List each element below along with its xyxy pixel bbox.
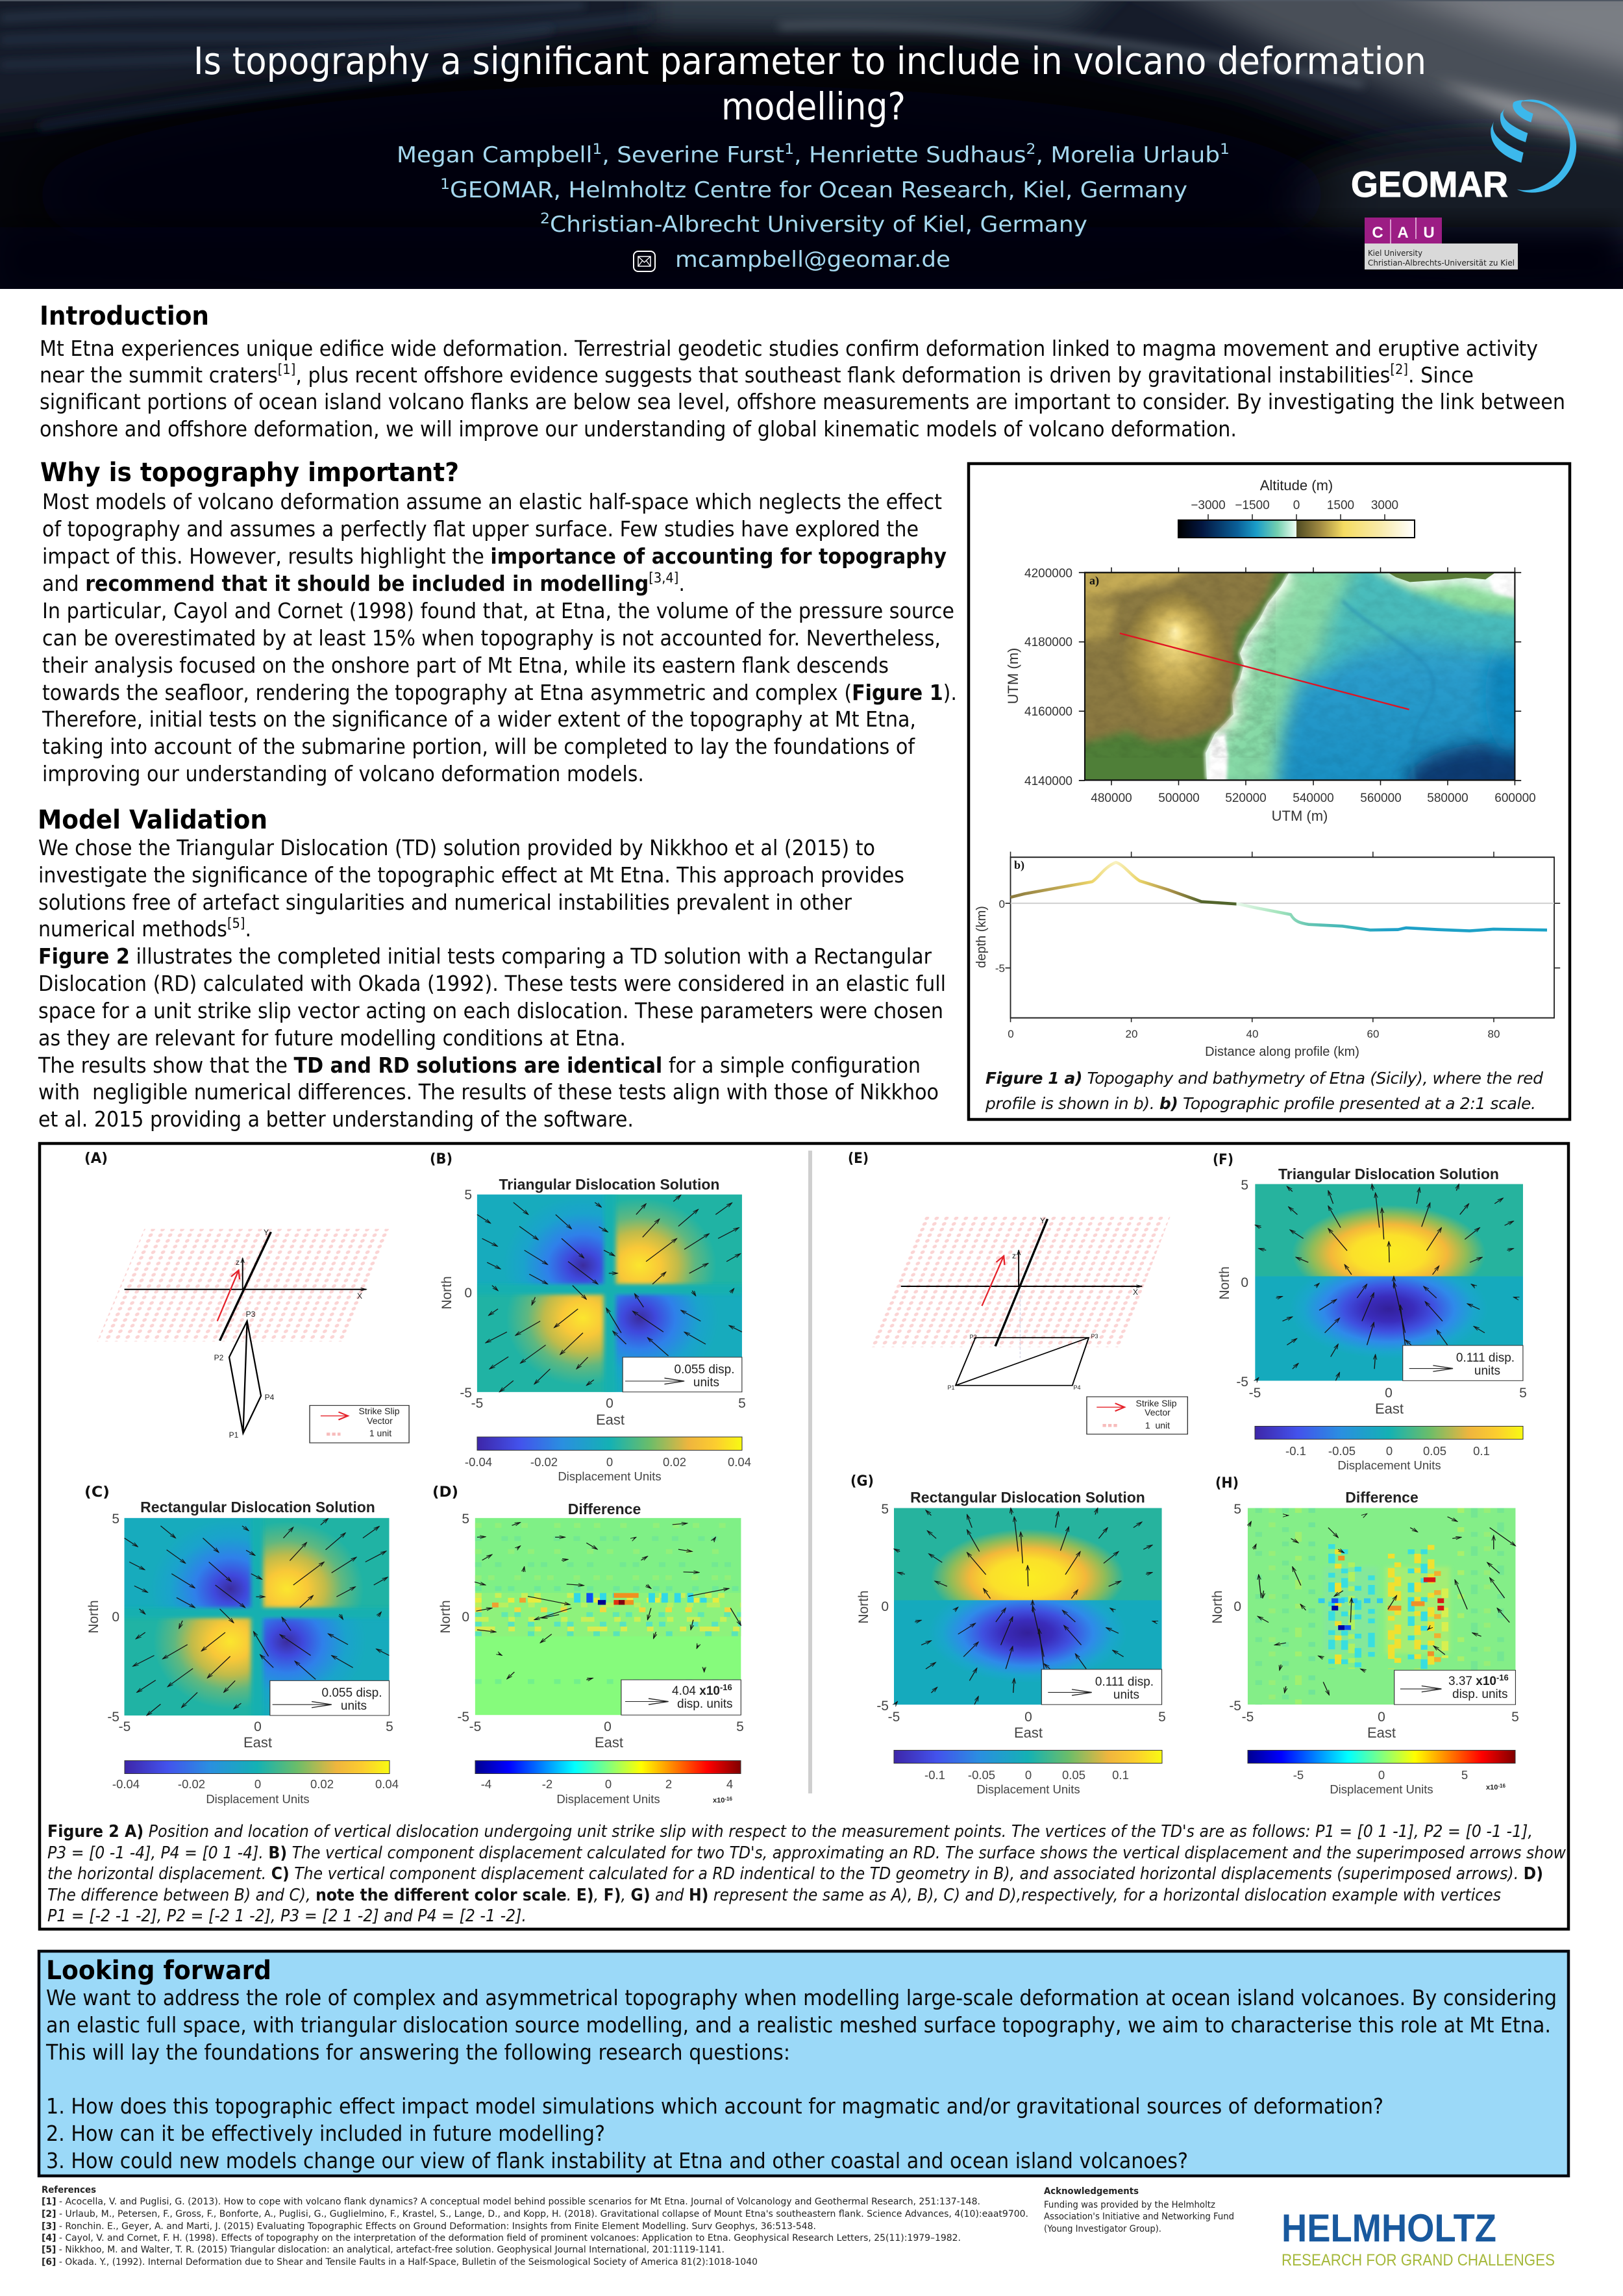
chart D: difference: 0 [462, 1610, 469, 1625]
heading: why is topography important: Why is topography important? [40, 458, 459, 488]
chart B: triangular dislocation solution: 0 [464, 1286, 472, 1301]
chart C: rectangular dislocation solution: 0.055 disp. [322, 1686, 382, 1700]
authors and affiliations: , Henriette Sudhaus [794, 142, 1026, 168]
chart: topographic profile: depth (km) [974, 906, 989, 968]
chart: topographic profile: Distance along profile (km) [1205, 1045, 1359, 1059]
text block: looking forward body: an elastic full space, with triangular dislocation source modelling, and a realistic meshed surface topography, we aim to characterise this role at Mt Etna. [46, 2013, 1551, 2038]
chart D: difference: 5 [736, 1719, 744, 1734]
chart: topography map: UTM (m) [1272, 808, 1328, 824]
chart G: rectangular dislocation solution: 5 [1158, 1710, 1166, 1725]
text block: topography body: their analysis focused on the onshore part of Mt Etna, while its eastern flank descends [42, 653, 889, 678]
chart D: difference: -5 [469, 1719, 481, 1734]
chart C: rectangular dislocation solution: 5 [112, 1512, 119, 1527]
chart G: rectangular dislocation solution: East [1014, 1725, 1043, 1741]
colour scale: altitude: 3000 [1371, 499, 1398, 512]
text block: model validation body: as they are relevant for future modelling conditions at Etna. [38, 1026, 626, 1051]
chart C: rectangular dislocation solution: 0 [254, 1719, 262, 1734]
text block: topography body: impact of this. However, results highlight the importance of accounting for topography [42, 544, 947, 569]
chart G: rectangular dislocation solution: 0 [1024, 1710, 1032, 1725]
text block: introduction body: [1] [278, 362, 295, 377]
text block: references: References [42, 2185, 96, 2195]
chart B: triangular dislocation solution: 0 [606, 1396, 613, 1411]
text block: model validation body: The results show that the TD and RD solutions are identical for a simple configuration [38, 1053, 921, 1078]
caption: figure 2: P1 = [-2 -1 -2], P2 = [-2 1 -2], P3 = [2 1 -2] and P4 = [2 -1 -2]. [47, 1906, 527, 1926]
authors and affiliations: 1 [784, 142, 794, 158]
chart: topography map: a) [1089, 574, 1099, 588]
text block: references: [6] - Okada. Y., (1992). Internal Deformation due to Shear and Tensile Faults in a Half-Space, Bulletin of the Seismological Society of America 81(2):1018-1040 [42, 2257, 758, 2267]
chart E: horizontal dislocation geometry: X [1133, 1288, 1138, 1297]
chart G: rectangular dislocation solution: -0.1 [924, 1768, 945, 1782]
chart G: rectangular dislocation solution: Displacement Units [976, 1782, 1080, 1796]
logo: CAU Kiel University: C [1372, 224, 1383, 242]
chart D: difference [432, 1484, 744, 1806]
chart A: vertical dislocation geometry: P2 [214, 1353, 224, 1362]
chart C: rectangular dislocation solution: -5 [119, 1719, 130, 1734]
chart D: difference: -16 [725, 1796, 732, 1802]
text block: introduction body [40, 336, 1565, 442]
chart E: horizontal dislocation geometry: Y [1040, 1216, 1045, 1225]
chart B: triangular dislocation solution: 5 [738, 1396, 746, 1411]
chart: topography map: 500000 [1158, 792, 1200, 805]
chart E: horizontal dislocation geometry: Vector [1145, 1407, 1171, 1417]
text block: model validation body: numerical methods [38, 917, 243, 942]
text block: acknowledgements [1044, 2186, 1234, 2234]
chart: topographic profile [974, 852, 1560, 1059]
text block: model validation body: solutions free of artefact singularities and numerical instabilities prevalent in other [38, 890, 852, 915]
chart: topography map: 4180000 [1024, 636, 1072, 649]
caption: figure 2 [47, 1822, 1566, 1926]
chart E: horizontal dislocation geometry: 1 unit [1145, 1420, 1170, 1430]
text block: acknowledgements: Association's Initiative and Networking Fund [1044, 2212, 1234, 2222]
text block: model validation body: space for a unit strike slip vector acting on each dislocation. These parameters were chosen [38, 999, 943, 1023]
chart D: difference: disp. units [677, 1697, 733, 1711]
chart B: triangular dislocation solution: East [596, 1412, 625, 1428]
text block: model validation body: Figure 2 illustrates the completed initial tests comparing a TD solution with a Rectangular [38, 944, 932, 969]
text block: acknowledgements: Funding was provided by the Helmholtz [1044, 2200, 1215, 2210]
heading: introduction: Introduction [40, 301, 209, 331]
chart H: difference: -16 [1498, 1783, 1505, 1789]
chart B: triangular dislocation solution: 5 [464, 1188, 472, 1203]
chart D: difference: Displacement Units [556, 1792, 660, 1806]
chart H: difference [1210, 1475, 1519, 1796]
chart: topography map: 4140000 [1024, 775, 1072, 788]
chart E: horizontal dislocation geometry: P2 [969, 1334, 977, 1340]
panel: figure 2 [40, 1143, 1568, 1929]
logo: CAU Kiel University [1365, 218, 1518, 269]
chart G: rectangular dislocation solution: -0.05 [968, 1768, 995, 1782]
chart E: horizontal dislocation geometry: P3 [1091, 1333, 1098, 1340]
chart H: difference: North [1210, 1590, 1225, 1624]
label A: (A) [84, 1151, 108, 1167]
chart: topographic profile: 40 [1246, 1028, 1258, 1040]
chart A: vertical dislocation geometry: Y [264, 1228, 269, 1237]
chart F: triangular dislocation solution: Displacement Units [1337, 1458, 1441, 1472]
text block: introduction body: . Since [1408, 363, 1474, 388]
chart F: triangular dislocation solution: East [1375, 1401, 1404, 1417]
chart A: vertical dislocation geometry [97, 1228, 409, 1443]
chart G: rectangular dislocation solution: 5 [881, 1502, 889, 1517]
colour scale: altitude: −1500 [1235, 499, 1270, 512]
chart D: difference: 4.04 x10 [672, 1684, 720, 1698]
logo: Helmholtz: RESEARCH FOR GRAND CHALLENGES [1282, 2251, 1555, 2269]
chart B: triangular dislocation solution: North [440, 1276, 454, 1310]
chart: topographic profile: -5 [995, 962, 1005, 975]
chart H: difference: Displacement Units [1330, 1782, 1433, 1796]
chart H: difference: 0 [1233, 1599, 1241, 1614]
text block: topography body: In particular, Cayol and Cornet (1998) found that, at Etna, the volume of the pressure source [42, 599, 954, 623]
chart D: difference: Difference [568, 1501, 641, 1517]
text block: references: [5] - Nikkhoo, M. and Walter, T. R. (2015) Triangular dislocation: an analytical, artefact-free solution. Geophysical Journal International, 201:1119-1141. [42, 2245, 725, 2255]
panel: figure 1 [969, 464, 1589, 1119]
chart: topography map [1008, 568, 1535, 823]
chart C: rectangular dislocation solution: -5 [107, 1710, 119, 1725]
chart D: difference: x10 [713, 1797, 725, 1804]
text block: references: [4] - Cayol, V. and Cornet, F. H. (1998). Effects of topography on the interpretation of the deformation field of prominent volcanoes: Application to Etna. Geophysical Research Letters, 25(11):1979–1982. [42, 2233, 961, 2243]
chart D: difference: 0 [605, 1777, 612, 1791]
chart A: vertical dislocation geometry: 1 unit [369, 1428, 391, 1438]
panel: looking forward [39, 1951, 1568, 2176]
chart F: triangular dislocation solution [1213, 1152, 1530, 1472]
text block: references: [3] - Ronchin. E., Geyer, A. and Marti, J. (2015) Evaluating Topographic Effects on Ground Deformation: Insights from Finite Element Modelling. Surv Geophys, 36:513-548. [42, 2221, 816, 2232]
chart H: difference: 3.37 x10 [1448, 1675, 1496, 1688]
logo: CAU Kiel University: U [1423, 224, 1435, 242]
text block: topography body: . [678, 571, 685, 596]
caption: figure 2: P3 = [0 -1 -4], P4 = [0 1 -4]. B) The vertical component displacement calculated for two TD's, approximating an RD. The surface shows the vertical displacement and the superimposed arrows show [47, 1843, 1566, 1863]
chart F: triangular dislocation solution: 0.1 [1473, 1444, 1490, 1458]
chart C: rectangular dislocation solution: East [243, 1734, 272, 1751]
chart D: difference: (D) [432, 1484, 458, 1501]
chart B: triangular dislocation solution: 0.055 disp. [675, 1363, 734, 1377]
chart C: rectangular dislocation solution: Displacement Units [206, 1792, 310, 1806]
chart H: difference: 0 [1378, 1710, 1385, 1725]
chart F: triangular dislocation solution: (F) [1213, 1152, 1233, 1168]
authors and affiliations: 2 [1026, 142, 1036, 158]
text block: introduction body: , plus recent offshore evidence suggests that southeast flank deformation is driven by gravitational instabilities [295, 363, 1390, 388]
chart E: horizontal dislocation geometry: P1 [947, 1384, 955, 1391]
chart C: rectangular dislocation solution [84, 1484, 399, 1806]
authors and affiliations: GEOMAR, Helmholtz Centre for Ocean Research, Kiel, Germany [450, 177, 1187, 203]
chart A: vertical dislocation geometry: P3 [246, 1310, 256, 1319]
text block: topography body: improving our understanding of volcano deformation models. [42, 762, 644, 786]
logo: CAU Kiel University: Christian-Albrechts-Universität zu Kiel [1368, 258, 1515, 268]
authors and affiliations: 2 [540, 211, 550, 227]
chart C: rectangular dislocation solution: units [341, 1699, 367, 1713]
text block: looking forward body: 2. How can it be effectively included in future modelling? [46, 2121, 605, 2146]
chart G: rectangular dislocation solution: 0 [1025, 1768, 1032, 1782]
chart F: triangular dislocation solution: 0.05 [1423, 1444, 1446, 1458]
chart: topography map: 480000 [1091, 792, 1132, 805]
text block: looking forward body [45, 1986, 1557, 2173]
chart G: rectangular dislocation solution: (G) [850, 1473, 874, 1490]
chart: topographic profile: 0 [999, 898, 1005, 910]
logo: CAU Kiel University: A [1397, 224, 1409, 242]
chart C: rectangular dislocation solution: -0.04 [112, 1777, 140, 1791]
chart: topographic profile: b) [1014, 858, 1024, 872]
logo: CAU Kiel University: Kiel University [1368, 249, 1422, 258]
chart D: difference: -4 [481, 1777, 491, 1791]
chart A: vertical dislocation geometry: P4 [265, 1393, 275, 1402]
chart: topographic profile: 60 [1367, 1028, 1379, 1040]
chart F: triangular dislocation solution: 5 [1519, 1386, 1527, 1401]
chart: topography map: 580000 [1427, 792, 1468, 805]
text block: references: [2] - Urlaub, M., Petersen, F., Gross, F., Bonforte, A., Puglisi, G., Guglielmino, F., Krastel, S., Lange, D., and Kopp, H. (2018). Gravitational collapse of Mount Etna's southeastern flank. Science Advances, 4(10):eaat9700. [42, 2209, 1028, 2219]
chart F: triangular dislocation solution: 0 [1385, 1386, 1393, 1401]
chart F: triangular dislocation solution: -0.1 [1285, 1444, 1306, 1458]
text block: model validation body [38, 836, 946, 1132]
chart F: triangular dislocation solution: 0.111 disp. [1456, 1351, 1515, 1365]
chart B: triangular dislocation solution [430, 1151, 751, 1483]
chart H: difference: -16 [1496, 1673, 1509, 1682]
authors and affiliations: , Morelia Urlaub [1036, 142, 1220, 168]
text block: acknowledgements: Acknowledgements [1044, 2186, 1139, 2197]
chart E: horizontal dislocation geometry: Strike Slip [1135, 1398, 1177, 1408]
logo: GEOMAR: GEOMAR [1351, 164, 1508, 205]
chart G: rectangular dislocation solution [850, 1473, 1168, 1796]
text block: model validation body: [5] [227, 916, 245, 931]
authors and affiliations [397, 142, 1230, 272]
chart G: rectangular dislocation solution: 0.1 [1112, 1768, 1129, 1782]
chart C: rectangular dislocation solution: Rectangular Dislocation Solution [140, 1499, 375, 1516]
authors and affiliations: 1 [440, 177, 450, 193]
chart B: triangular dislocation solution: -0.02 [530, 1455, 558, 1469]
panel: model validation [38, 805, 946, 1132]
chart C: rectangular dislocation solution: 0 [112, 1610, 119, 1625]
chart: topography map: 4200000 [1024, 567, 1072, 580]
chart C: rectangular dislocation solution: 0 [254, 1777, 261, 1791]
chart B: triangular dislocation solution: Triangular Dislocation Solution [499, 1176, 719, 1193]
text block: topography body: of topography and assumes a perfectly flat upper surface. Few studies have explored the [42, 517, 919, 542]
chart F: triangular dislocation solution: Triangular Dislocation Solution [1278, 1166, 1499, 1182]
chart: topography map: 560000 [1360, 792, 1402, 805]
chart B: triangular dislocation solution: (B) [430, 1151, 452, 1167]
text block: looking forward body: 3. How could new models change our view of flank instability at Etna and other coastal and ocean island volcanoes? [46, 2149, 1188, 2173]
chart H: difference: disp. units [1452, 1688, 1508, 1701]
header band [0, 0, 1623, 305]
chart H: difference: 5 [1511, 1710, 1519, 1725]
chart F: triangular dislocation solution: 0 [1386, 1444, 1393, 1458]
chart F: triangular dislocation solution: -0.05 [1328, 1444, 1356, 1458]
chart G: rectangular dislocation solution: -5 [876, 1699, 889, 1714]
chart G: rectangular dislocation solution: -5 [888, 1710, 900, 1725]
chart: topography map: 600000 [1494, 792, 1536, 805]
caption: figure 2: The difference between B) and C), note the different color scale. E), F), G) and H) represent the same as A), B), C) and D),respectively, for a horizontal dislocation example with vertices [47, 1886, 1501, 1905]
chart E: horizontal dislocation geometry [848, 1151, 1187, 1434]
chart D: difference: -2 [542, 1777, 552, 1791]
colour scale: altitude [1178, 477, 1415, 538]
text block: introduction body: onshore and offshore deformation, we will improve our understanding of global kinematic models of volcano deformation. [40, 417, 1237, 442]
text block: model validation body: et al. 2015 providing a better understanding of the software. [38, 1107, 634, 1132]
caption: figure 2: Figure 2 A) Position and location of vertical dislocation undergoing unit strike slip with respect to the measurement points. The vertices of the TD's are as follows: P1 = [0 1 -1], P2 = [0 -1 -1], [47, 1822, 1533, 1841]
icon: email envelope [634, 251, 655, 271]
logo: Helmholtz [1282, 2206, 1555, 2269]
chart F: triangular dislocation solution: units [1474, 1364, 1500, 1378]
text block: topography body: Most models of volcano deformation assume an elastic half-space which neglects the effect [42, 490, 942, 514]
text block: model validation body: investigate the significance of the topographic effect at Mt Etna. This approach provides [38, 863, 904, 888]
chart F: triangular dislocation solution: -5 [1249, 1386, 1261, 1401]
chart D: difference: 2 [665, 1777, 672, 1791]
text block: topography body: Therefore, initial tests on the significance of a wider extent of the topography at Mt Etna, [42, 707, 916, 732]
chart F: triangular dislocation solution: 0 [1241, 1275, 1248, 1290]
text block: topography body: towards the seafloor, rendering the topography at Etna asymmetric and complex (Figure 1). [42, 680, 957, 705]
authors and affiliations: mcampbell@geomar.de [675, 247, 950, 272]
text block: topography body [42, 490, 957, 786]
chart E: horizontal dislocation geometry: P4 [1073, 1384, 1081, 1391]
text block: acknowledgements: (Young Investigator Group). [1044, 2224, 1161, 2234]
chart F: triangular dislocation solution: North [1217, 1266, 1232, 1300]
chart C: rectangular dislocation solution: (C) [84, 1484, 110, 1501]
chart D: difference: North [438, 1600, 453, 1634]
chart: topographic profile: 0 [1008, 1028, 1014, 1040]
chart E: horizontal dislocation geometry: z [1012, 1251, 1016, 1260]
logo: GEOMAR [1351, 99, 1576, 205]
chart C: rectangular dislocation solution: -0.02 [178, 1777, 205, 1791]
chart B: triangular dislocation solution: 0.04 [728, 1455, 751, 1469]
heading: looking forward: Looking forward [46, 1956, 271, 1986]
caption: figure 1: profile is shown in b). b) Topographic profile presented at a 2:1 scale. [985, 1094, 1536, 1113]
chart A: vertical dislocation geometry: P1 [229, 1430, 239, 1440]
text block: references: [1] - Acocella, V. and Puglisi, G. (2013). How to cope with volcano flank dynamics? A conceptual model behind possible scenarios for Mt Etna. Journal of Volcanology and Geothermal Research, 251:137-148. [42, 2197, 980, 2207]
colour scale: altitude: −3000 [1191, 499, 1226, 512]
chart A: vertical dislocation geometry: Vector [367, 1416, 393, 1426]
colour scale: altitude: 1500 [1327, 499, 1354, 512]
text block: references [42, 2185, 1028, 2267]
text block: model validation body: with negligible numerical differences. The results of these tests align with those of Nikkhoo [38, 1080, 939, 1104]
chart: topographic profile: 20 [1126, 1028, 1137, 1040]
chart A: vertical dislocation geometry: Strike Slip [358, 1406, 400, 1416]
chart B: triangular dislocation solution: 0.02 [663, 1455, 686, 1469]
authors and affiliations: 1 [1220, 142, 1230, 158]
chart: topography map: UTM (m) [1005, 648, 1021, 704]
chart H: difference: -5 [1229, 1699, 1241, 1714]
chart B: triangular dislocation solution: -5 [471, 1396, 483, 1411]
chart C: rectangular dislocation solution: 5 [386, 1719, 393, 1734]
chart B: triangular dislocation solution: units [693, 1376, 719, 1390]
heading: model validation: Model Validation [38, 805, 267, 835]
chart: topographic profile: 80 [1488, 1028, 1500, 1040]
chart A: vertical dislocation geometry: z [236, 1258, 240, 1267]
chart D: difference: -5 [457, 1710, 469, 1725]
colour scale: altitude: 0 [1293, 499, 1300, 512]
caption: figure 2: the horizontal displacement. C) The vertical component displacement calculated for a RD indentical to the TD geometry in B), and associated horizontal displacements (superimposed arrows). D) [47, 1864, 1543, 1884]
chart A: vertical dislocation geometry: X [357, 1292, 362, 1301]
chart H: difference: 0 [1378, 1768, 1385, 1782]
chart B: triangular dislocation solution: -0.04 [465, 1455, 492, 1469]
text block: topography body: and recommend that it should be included in modelling [42, 571, 694, 596]
text block: model validation body: . [245, 917, 251, 942]
chart H: difference: Difference [1345, 1489, 1419, 1506]
chart H: difference: x10 [1486, 1784, 1498, 1791]
chart D: difference: -16 [720, 1682, 732, 1692]
chart C: rectangular dislocation solution: North [86, 1600, 101, 1634]
chart H: difference: 5 [1233, 1502, 1241, 1517]
chart D: difference: 0 [604, 1719, 612, 1734]
chart G: rectangular dislocation solution: units [1113, 1688, 1139, 1702]
chart H: difference: East [1367, 1725, 1396, 1741]
chart: topography map: 4160000 [1024, 705, 1072, 719]
text block: topography body: can be overestimated by at least 15% when topography is not accounted for. Nevertheless, [42, 626, 941, 651]
chart B: triangular dislocation solution: 0 [606, 1455, 613, 1469]
chart G: rectangular dislocation solution: 0.05 [1062, 1768, 1085, 1782]
text block: model validation body: We chose the Triangular Dislocation (TD) solution provided by Nikkhoo et al (2015) to [38, 836, 875, 860]
chart H: difference: (H) [1215, 1475, 1239, 1491]
chart C: rectangular dislocation solution: 0.02 [310, 1777, 334, 1791]
caption: figure 1 [985, 1069, 1543, 1113]
text block: topography body: [3,4] [649, 570, 678, 586]
text block: introduction body: near the summit craters [40, 363, 296, 388]
text block: introduction body: Mt Etna experiences unique edifice wide deformation. Terrestrial geodetic studies confirm deformation linked to magma movement and eruptive activity [40, 336, 1538, 361]
chart: topography map: 520000 [1225, 792, 1267, 805]
authors and affiliations: , Severine Furst [602, 142, 784, 168]
text block: topography body: taking into account of the submarine portion, will be completed to lay the foundations of [42, 734, 915, 759]
text block: looking forward body: 1. How does this topographic effect impact model simulations which account for magmatic and/or gravitational sources of deformation? [46, 2094, 1383, 2119]
chart D: difference: 5 [462, 1512, 469, 1527]
text block: looking forward body: This will lay the foundations for answering the following research questions: [45, 2040, 790, 2065]
chart G: rectangular dislocation solution: 0 [881, 1599, 889, 1614]
logo: Helmholtz: HELMHOLTZ [1282, 2206, 1496, 2250]
chart H: difference: -5 [1242, 1710, 1254, 1725]
panel: introduction [40, 301, 1565, 442]
chart F: triangular dislocation solution: -5 [1236, 1375, 1248, 1390]
text block: introduction body: [2] [1390, 362, 1408, 377]
colour scale: altitude: Altitude (m) [1260, 477, 1333, 493]
authors and affiliations: 1 [592, 142, 602, 158]
text block: model validation body: Dislocation (RD) calculated with Okada (1992). These tests were considered in an elastic full [38, 971, 946, 996]
chart G: rectangular dislocation solution: North [856, 1590, 871, 1624]
chart H: difference: 5 [1461, 1768, 1468, 1782]
chart C: rectangular dislocation solution: 0.04 [375, 1777, 399, 1791]
authors and affiliations: Christian-Albrecht University of Kiel, Germany [550, 212, 1087, 237]
title: Is topography a significant parameter to include in volcano deformation [193, 39, 1426, 83]
panel: why is topography important [40, 458, 957, 786]
chart H: difference: -5 [1293, 1768, 1304, 1782]
chart D: difference: 4 [726, 1777, 733, 1791]
chart F: triangular dislocation solution: 5 [1241, 1178, 1248, 1193]
chart: topography map: 540000 [1293, 792, 1334, 805]
chart B: triangular dislocation solution: Displacement Units [558, 1469, 662, 1483]
chart E: horizontal dislocation geometry: (E) [848, 1151, 869, 1167]
chart B: triangular dislocation solution: -5 [460, 1386, 472, 1401]
chart G: rectangular dislocation solution: 0.111 disp. [1095, 1675, 1154, 1689]
authors and affiliations: Megan Campbell [397, 142, 579, 168]
caption: figure 1: Figure 1 a) Topogaphy and bathymetry of Etna (Sicily), where the red [985, 1069, 1543, 1088]
chart D: difference: East [595, 1734, 623, 1751]
title: modelling? [721, 84, 906, 129]
title [193, 39, 1426, 129]
chart G: rectangular dislocation solution: Rectangular Dislocation Solution [910, 1489, 1145, 1506]
